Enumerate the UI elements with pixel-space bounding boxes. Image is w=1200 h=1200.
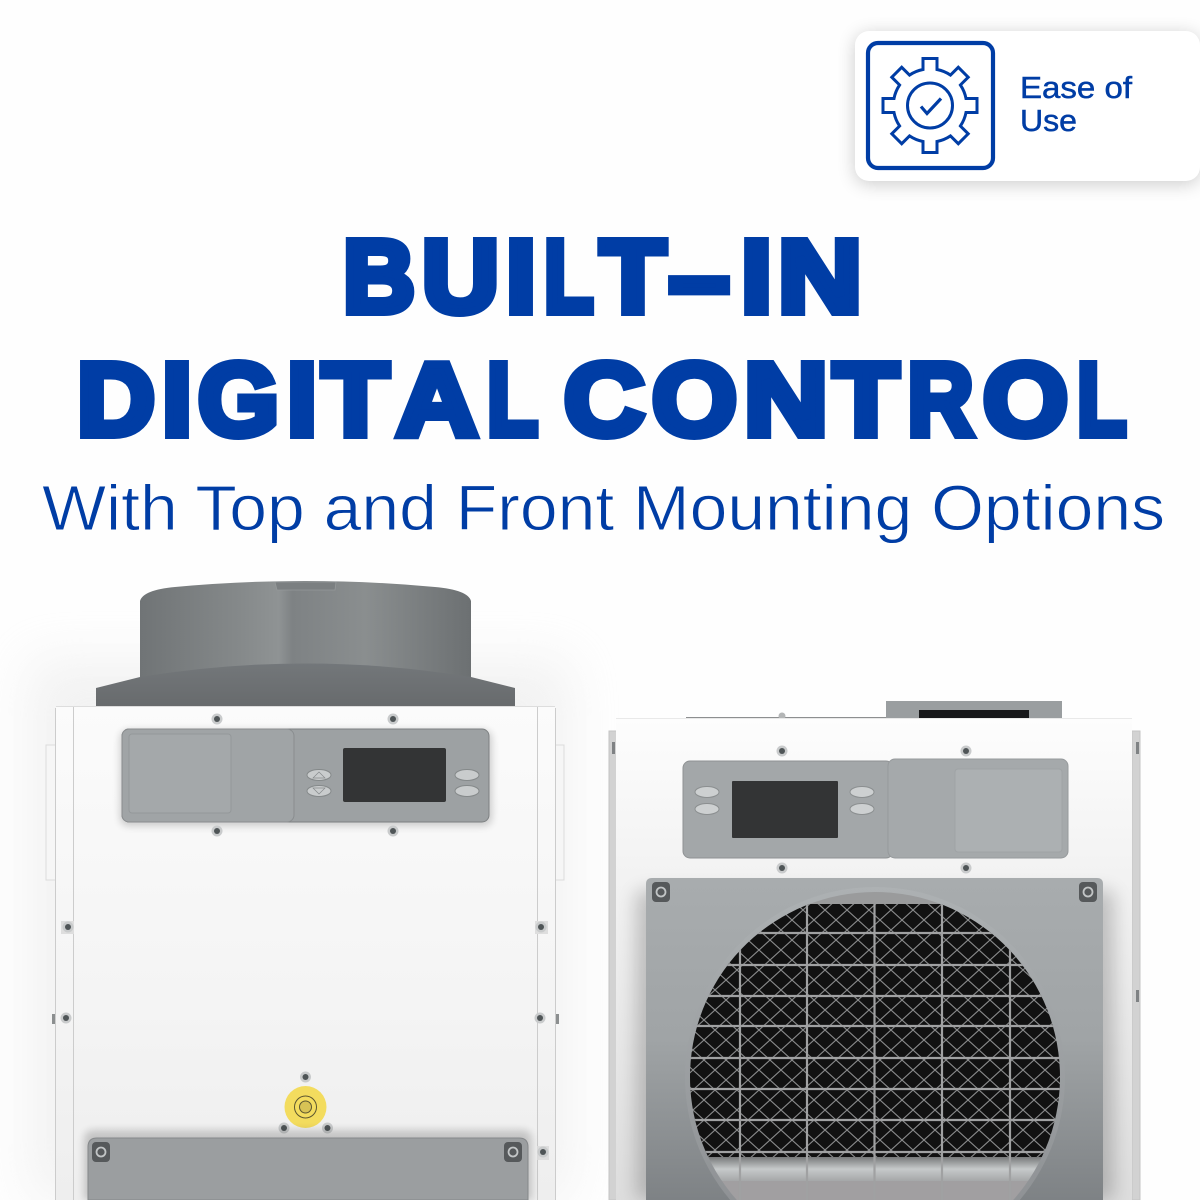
rear top housing [686, 701, 1062, 720]
panel buttons [695, 786, 874, 814]
title: T [600, 219, 666, 334]
title: I [506, 219, 536, 334]
cabinet body [56, 706, 556, 1200]
panel cover [122, 729, 294, 822]
fan plate [636, 878, 1114, 1200]
title: I [287, 342, 317, 457]
panel screws [60, 714, 549, 1160]
panel shadow [120, 730, 492, 826]
title: - [668, 219, 730, 334]
control panel [683, 759, 1068, 858]
title: T [322, 342, 389, 457]
title: B [343, 219, 415, 334]
duct collar [140, 581, 471, 690]
intake grille [680, 885, 1080, 1200]
panel screws [776, 746, 972, 874]
title: N [744, 342, 828, 457]
title: C [564, 342, 644, 457]
title: I [741, 219, 772, 334]
title: A [396, 342, 478, 457]
rail clips [52, 1014, 559, 1024]
rail clips [612, 742, 1139, 1002]
badge label: Use [1020, 103, 1077, 138]
title: R [908, 342, 974, 457]
title: L [544, 219, 594, 334]
display screen [732, 781, 838, 838]
display screen [343, 748, 446, 802]
title: O [983, 342, 1068, 457]
cabinet body [616, 718, 1132, 1200]
bottom grey plate [84, 1130, 532, 1200]
unit: front-mounted control view [609, 701, 1140, 1200]
title: U [422, 219, 499, 334]
title: O [652, 342, 737, 457]
title [77, 219, 1126, 457]
unit: top-mounted control view [46, 581, 564, 1200]
title: I [162, 342, 192, 457]
duct shroud [96, 664, 515, 708]
side lugs [46, 745, 564, 880]
air intake ring [685, 887, 1065, 1200]
icon: gear with check [868, 43, 993, 168]
title: L [1077, 342, 1126, 457]
title: L [487, 342, 536, 457]
soft shadow behind left unit [30, 660, 570, 1200]
badge label: Ease of [1020, 70, 1132, 105]
control panel [122, 729, 489, 822]
feature badge: ease of use [855, 31, 1200, 184]
title: G [198, 342, 279, 457]
title: D [77, 342, 155, 457]
title: T [833, 342, 899, 457]
title: N [778, 219, 862, 334]
badge card [855, 31, 1200, 184]
panel buttons [307, 770, 479, 796]
side rails [609, 731, 1140, 1200]
bubble level [278, 1072, 333, 1134]
panel cover [888, 759, 1068, 858]
subtitle: With Top and Front Mounting Options [42, 472, 1165, 544]
